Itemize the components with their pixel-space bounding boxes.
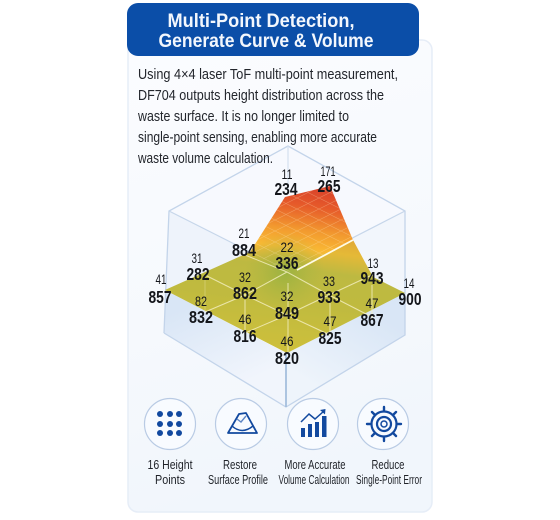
data labels: point numbers: 21 — [238, 226, 250, 241]
data labels: point numbers: 47 — [324, 314, 336, 329]
data labels: point numbers: 14 — [404, 276, 415, 291]
data labels: point numbers: 46 — [238, 312, 252, 327]
data labels: point numbers: 900 — [398, 289, 422, 309]
data labels: point numbers: 13 — [368, 256, 378, 271]
label: more accurate volume calculation: Volume Calculation — [278, 473, 350, 487]
label: restore surface profile: Restore — [223, 458, 257, 472]
header banner: Generate Curve & Volume — [158, 31, 374, 52]
data labels: point numbers: 849 — [275, 303, 299, 323]
data labels: point numbers: 22 — [280, 240, 294, 255]
data labels: point numbers: 884 — [232, 240, 256, 260]
infographic canvas — [127, 3, 433, 513]
description text: Using 4×4 laser ToF multi-point measurement, — [138, 67, 398, 83]
heat-map surface — [165, 186, 405, 353]
label: restore surface profile — [208, 458, 268, 487]
data labels: point numbers: 265 — [318, 176, 341, 196]
icon: 16 height points — [144, 398, 196, 450]
icon: accurate volume chart — [288, 398, 338, 450]
label: more accurate volume calculation — [278, 458, 350, 487]
data labels: point numbers: 32 — [280, 289, 294, 304]
label: reduce single-point error: Reduce — [372, 458, 405, 472]
data labels: point numbers: 943 — [360, 268, 384, 288]
description text: DF704 outputs height distribution across the — [138, 88, 384, 104]
data labels: point numbers: 825 — [318, 328, 342, 348]
data labels: point numbers: 933 — [318, 287, 341, 307]
data labels: point numbers: 32 — [239, 270, 251, 285]
data labels: point numbers: 47 — [366, 296, 378, 311]
description text — [137, 67, 398, 167]
icon: target reduce error — [358, 398, 408, 450]
data labels: point numbers: 171 — [320, 164, 336, 179]
header banner: Multi-Point Detection, — [168, 11, 354, 32]
description text: waste surface. It is no longer limited to — [137, 109, 349, 125]
label: reduce single-point error: Single-Point Error — [356, 473, 422, 487]
data labels: point numbers: 82 — [195, 294, 207, 309]
data labels: point numbers: 282 — [186, 264, 210, 284]
label: restore surface profile: Surface Profile — [208, 473, 268, 487]
panel: content card — [128, 40, 432, 512]
label: more accurate volume calculation: More Accurate — [284, 458, 346, 472]
data labels: point numbers: 336 — [276, 253, 299, 273]
3D cube wireframe — [164, 146, 405, 407]
data labels: point numbers: 862 — [233, 283, 257, 303]
label: 16 height points — [148, 458, 193, 487]
data labels: point numbers — [148, 164, 422, 368]
data labels: point numbers: 832 — [189, 307, 213, 327]
label: 16 height points: 16 Height — [148, 458, 193, 472]
data labels: point numbers: 867 — [360, 310, 384, 330]
label: 16 height points: Points — [155, 473, 185, 487]
data labels: point numbers: 820 — [275, 348, 299, 368]
description text: waste volume calculation. — [137, 151, 273, 167]
header banner — [127, 3, 419, 56]
data labels: point numbers: 857 — [148, 287, 172, 307]
data labels: point numbers: 11 — [282, 167, 292, 182]
data labels: point numbers: 46 — [280, 334, 294, 349]
description text: single-point sensing, enabling more accurate — [138, 130, 377, 146]
label: reduce single-point error — [356, 458, 422, 487]
data labels: point numbers: 41 — [156, 272, 166, 287]
data labels: point numbers: 31 — [192, 251, 202, 266]
data labels: point numbers: 33 — [323, 274, 335, 289]
data labels: point numbers: 234 — [274, 179, 298, 199]
icon: surface profile — [216, 398, 266, 450]
data labels: point numbers: 816 — [234, 326, 257, 346]
